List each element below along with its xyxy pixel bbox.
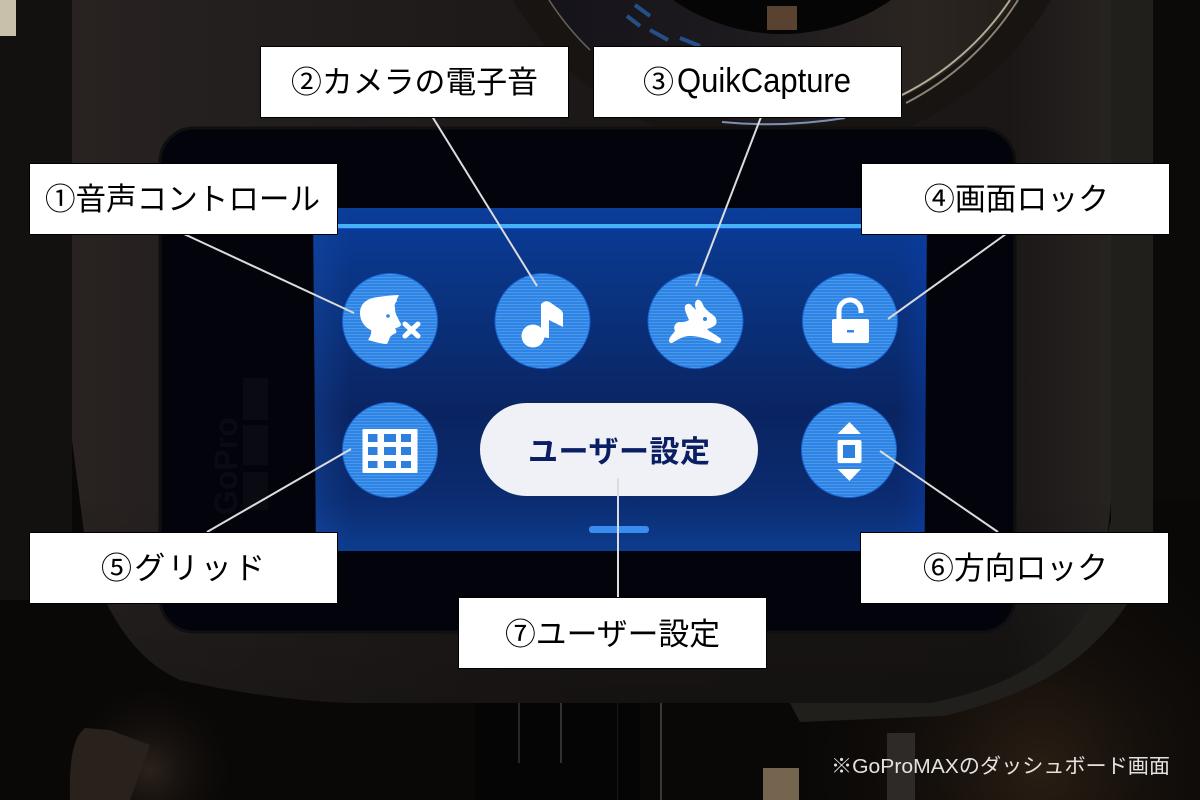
label 6: orientation lock [860,532,1168,604]
label 6: orientation lock: ⑥方向ロック [923,551,1108,586]
label 4: screen lock: ④画面ロック [924,182,1109,217]
footnote: ※GoProMAXのダッシュボード画面 [831,755,1170,778]
label 2: camera beep: ②カメラの電子音 [291,65,538,100]
label 1: voice control: ①音声コントロール [45,182,320,217]
label 3: QuikCapture [594,46,902,118]
label 3: QuikCapture: QuikCapture [677,62,851,100]
leader lines [184,117,1006,597]
button: user settings: ユーザー設定 [528,436,710,469]
label 7: user settings [458,598,766,668]
icon: rabbit [648,274,743,368]
label 4: screen lock [862,164,1170,234]
touch screen [313,208,930,551]
lens [470,0,1094,154]
faint GoPro logo: GoPro [208,417,244,515]
faint GoPro logo [208,378,268,515]
icon: unlocked padlock [802,274,898,368]
screen bezel [160,128,1015,632]
label 5: grid: ⑤グリッド [101,551,265,586]
label 7: user settings: ⑦ユーザー設定 [505,617,720,652]
label 3: QuikCapture: ③ [643,65,674,100]
icon: orientation lock [802,402,896,498]
label 1: voice control [30,164,338,234]
label 5: grid [30,532,338,604]
page indicator bar [589,526,649,533]
button: user settings [480,403,758,496]
label 2: camera beep [260,46,568,118]
icon: voice control [342,274,438,368]
icon: music note [495,274,590,368]
icon: grid [342,402,438,498]
